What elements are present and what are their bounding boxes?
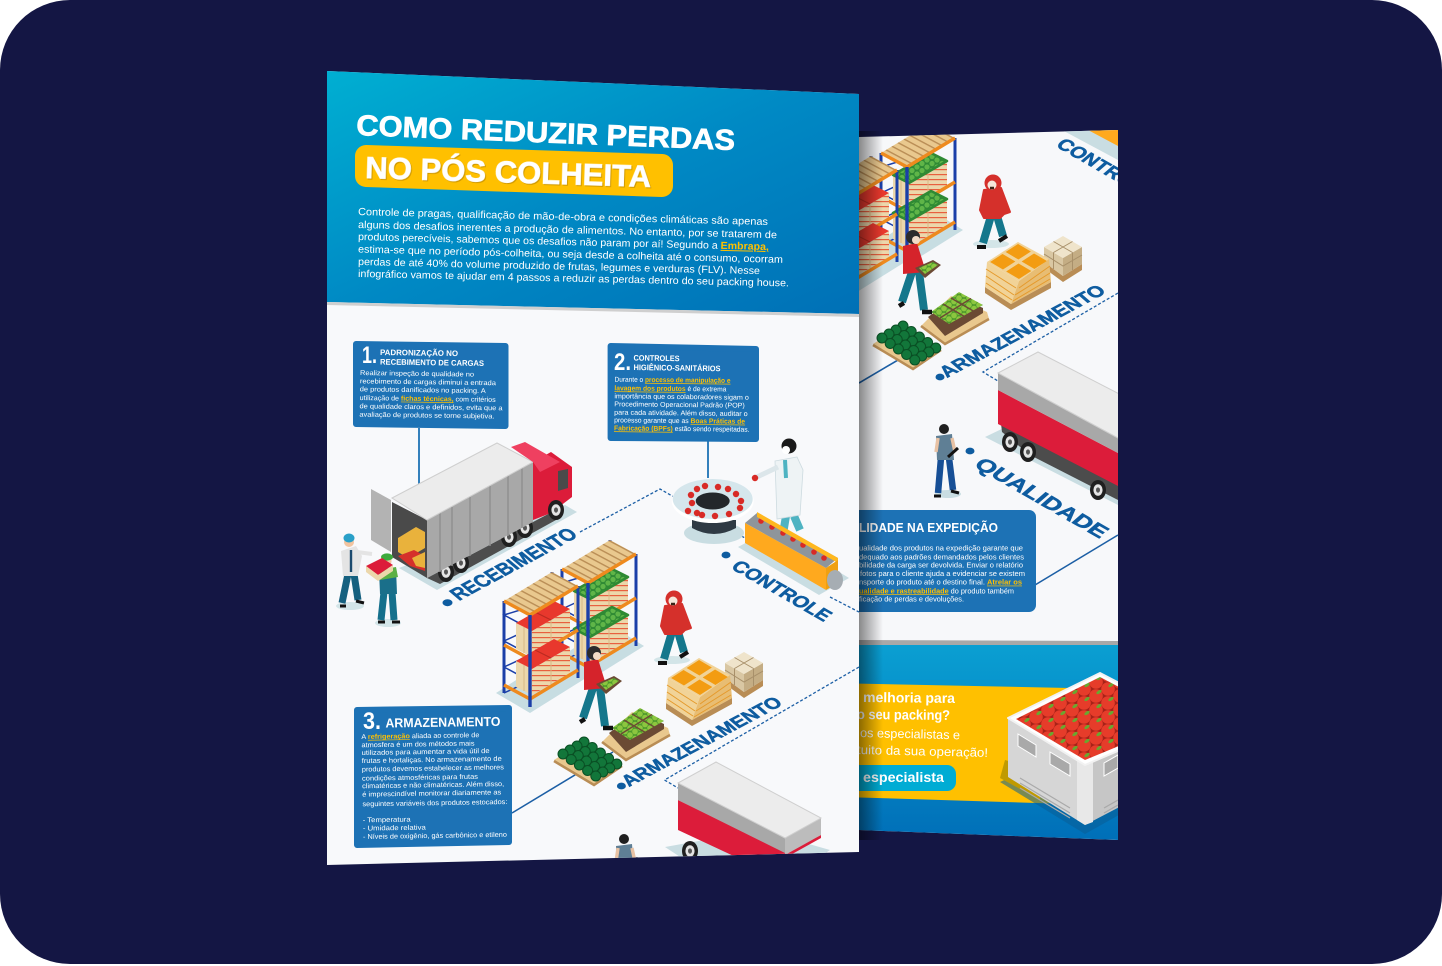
callout: step 2: CONTROLES xyxy=(633,354,680,363)
callout: step 1: 1. xyxy=(362,342,377,369)
callout: step 3: produtos devemos estabelecer as melhores xyxy=(362,764,505,774)
intro paragraph xyxy=(358,207,789,289)
callout: step 3: climatéricas e não climatéricas. Além disso, xyxy=(362,781,504,790)
callout: step 3: ARMAZENAMENTO xyxy=(385,714,501,730)
callout: step 3: A refrigeração aliada ao controle de xyxy=(361,732,480,741)
stem: box 1 to truck xyxy=(418,428,420,484)
callout: step 3: frutas e hortaliças. No armazenamento de xyxy=(362,756,502,765)
call to action heading: o seu packing? xyxy=(857,706,950,723)
dashed route line: back page xyxy=(983,293,1118,381)
footer shadow xyxy=(859,640,1118,646)
intro paragraph: infográfico vamos te ajudar em 4 passos a reduzir as perdas dentro do seu packing house. xyxy=(358,269,789,289)
scene: warehouse xyxy=(496,540,763,785)
call to action heading: melhoria para xyxy=(863,689,955,706)
intro paragraph: Controle de pragas, qualificação de mão-de-obra e condições climáticas são apenas xyxy=(358,207,768,228)
intro paragraph: estima-se que no período pós-colheita, ou seja desde a colheita até o consumo, ocorram xyxy=(358,245,783,266)
callout: step 3: é imprescindível monitorar diariamente as xyxy=(362,789,502,799)
callout: step 3: seguintes variáveis dos produtos estocados: xyxy=(362,799,508,808)
person: inspector cut off at page bottom xyxy=(614,834,638,858)
bullet and label: QUALIDADE: QUALIDADE xyxy=(970,454,1114,542)
call to action heading xyxy=(859,692,956,723)
conveyor corner xyxy=(1062,130,1118,160)
person: lab technician xyxy=(752,438,803,534)
bullet and label: ARMAZENAMENTO xyxy=(934,281,1110,381)
callout: step 1 xyxy=(356,342,506,426)
bullet and label: RECEBIMENTO: RECEBIMENTO xyxy=(445,524,582,604)
callout: step 1: de produtos danificados no packing. A xyxy=(360,386,486,395)
callout: step 3: atmosfera é um dos métodos mais xyxy=(361,741,475,749)
panel: back page xyxy=(859,130,1118,840)
stem: box 3 to pallets xyxy=(512,752,613,813)
callout: step 1: avaliação de produtos se torne subjetiva. xyxy=(359,412,495,420)
title line 1: COMO REDUZIR PERDAS xyxy=(356,110,736,157)
callout: step 3: 3. xyxy=(363,708,381,735)
callout: step 2: lavagem dos produtos é de extrema xyxy=(614,385,727,393)
scene: warehouse repeated on back page xyxy=(859,134,1082,370)
illustration: delivery truck xyxy=(371,442,577,590)
callout: 4 shipping quality: LIDADE NA EXPEDIÇÃO xyxy=(859,520,998,535)
callout: step 2: 2. xyxy=(614,349,631,376)
intro paragraph: alguns dos desafios inerentes a produção de alimentos. No entanto, por se tratarem de xyxy=(358,220,777,241)
call to action text: os especialistas e xyxy=(860,726,960,742)
callout: 4 shipping quality: nsporte do produto até o destino final. Atrelar os xyxy=(859,580,1022,587)
bullet and label: ARMAZENAMENTO: ARMAZENAMENTO xyxy=(616,693,787,790)
call to action band xyxy=(859,684,1068,804)
callout: step 2: Fabricação (BPFs) estão sendo respeitadas. xyxy=(614,425,750,434)
trailer: front page, cut off at page bottom xyxy=(665,762,830,856)
callout: step 2: processo garante que as Boas Práticas de xyxy=(614,417,745,426)
callout: 4 shipping quality: fotos para o cliente ajuda a evidenciar se existem xyxy=(860,571,1025,578)
bullet and label: ARMAZENAMENTO xyxy=(616,693,787,790)
panel: front page xyxy=(327,71,859,908)
dashed route: receiving to control xyxy=(580,489,859,612)
callout: step 2: Procedimento Operacional Padrão (POP) xyxy=(614,401,745,410)
callout: 4 shipping quality: ualidade dos produtos na expedição garante que xyxy=(859,546,1023,552)
callout: step 2: HIGIÊNICO-SANITÁRIOS xyxy=(633,363,721,373)
callout: step 1: PADRONIZAÇÃO NO xyxy=(380,348,458,358)
callout: step 1: Realizar inspeção de qualidade no xyxy=(360,370,474,379)
illustration: round washing table xyxy=(672,479,754,544)
header shadow xyxy=(327,302,859,317)
illustration: conveyor belt xyxy=(738,512,849,595)
callout: 4 shipping quality: dequado aos padrões demandados pelos clientes xyxy=(859,554,1025,561)
shadow cast by front page xyxy=(859,131,883,840)
bullet and label: CONTROLE xyxy=(722,552,837,625)
callout: step 3 xyxy=(357,708,509,845)
bullet and label: ARMAZENAMENTO: ARMAZENAMENTO xyxy=(934,281,1110,381)
person: quality inspector xyxy=(934,424,961,498)
intro paragraph: produtos perecíveis, sabemos que os desafios não param por aí! Segundo a Embrapa, xyxy=(358,232,769,253)
callout: 4 shipping quality: ualidade e rastreabilidade do produto também xyxy=(859,588,1014,595)
panel: footer xyxy=(859,645,1118,840)
icon: crate of apples xyxy=(1000,672,1118,834)
title line 2: NO PÓS COLHEITA xyxy=(365,149,652,194)
callout: step 3: - Temperatura xyxy=(363,817,411,824)
callout: step 3: - Umidade relativa xyxy=(363,825,426,833)
callout: step 1: RECEBIMENTO DE CARGAS xyxy=(380,358,485,368)
callout: step 2: importância que os colaboradores sigam o xyxy=(614,393,749,402)
callout: step 3: utilizados para aumentar a vida útil de xyxy=(362,748,490,757)
callout: 4 shipping quality xyxy=(780,510,1036,612)
callout: step 3: - Níveis de oxigênio, gás carbônico e etileno xyxy=(363,832,507,841)
stem: box 2 to washer xyxy=(707,441,709,478)
callout: step 2: Durante o processo de manipulação e xyxy=(614,377,731,385)
solid connector: shipping box xyxy=(1035,535,1118,585)
person: worker with clipboard xyxy=(336,534,372,610)
button: talk to a specialist: especialista xyxy=(863,769,944,785)
callout: 4 shipping quality: bilidade da carga ser devolvida. Enviar o relatório xyxy=(859,563,1023,570)
callout: step 1: recebimento de cargas diminui a entrada xyxy=(360,378,496,387)
callout: step 3: condições atmosféricas para frutas xyxy=(362,774,479,783)
header band xyxy=(327,71,859,314)
bullet and label: RECEBIMENTO xyxy=(442,524,582,606)
callout: step 1: de qualidade claros e definidos, evita que a xyxy=(360,403,503,412)
trailer: back page xyxy=(985,352,1118,505)
intro paragraph: perdas de até 40% do volume produzido de frutas, legumes e verduras (FLV). Nesse xyxy=(358,257,760,277)
call to action text: tuito da sua operação! xyxy=(857,743,988,760)
title highlight pill xyxy=(366,156,662,186)
callout: step 2 xyxy=(611,346,756,439)
button: talk to a specialist xyxy=(859,765,956,791)
callout: step 2: para cada atividade. Além disso, auditar o xyxy=(614,410,748,418)
label: CONTROLE: CONTROLE xyxy=(1052,135,1162,203)
solid connector: storage box xyxy=(859,340,932,383)
callout: step 1: utilização de fichas técnicas, com critérios xyxy=(360,395,496,404)
dashed route: storage to shipping xyxy=(664,667,859,788)
bullet and label: CONTROLE: CONTROLE xyxy=(727,557,837,625)
call to action text xyxy=(859,729,987,760)
callout: 4 shipping quality: ficação de perdas e devoluções. xyxy=(859,596,964,604)
person: worker carrying crate xyxy=(366,553,401,627)
